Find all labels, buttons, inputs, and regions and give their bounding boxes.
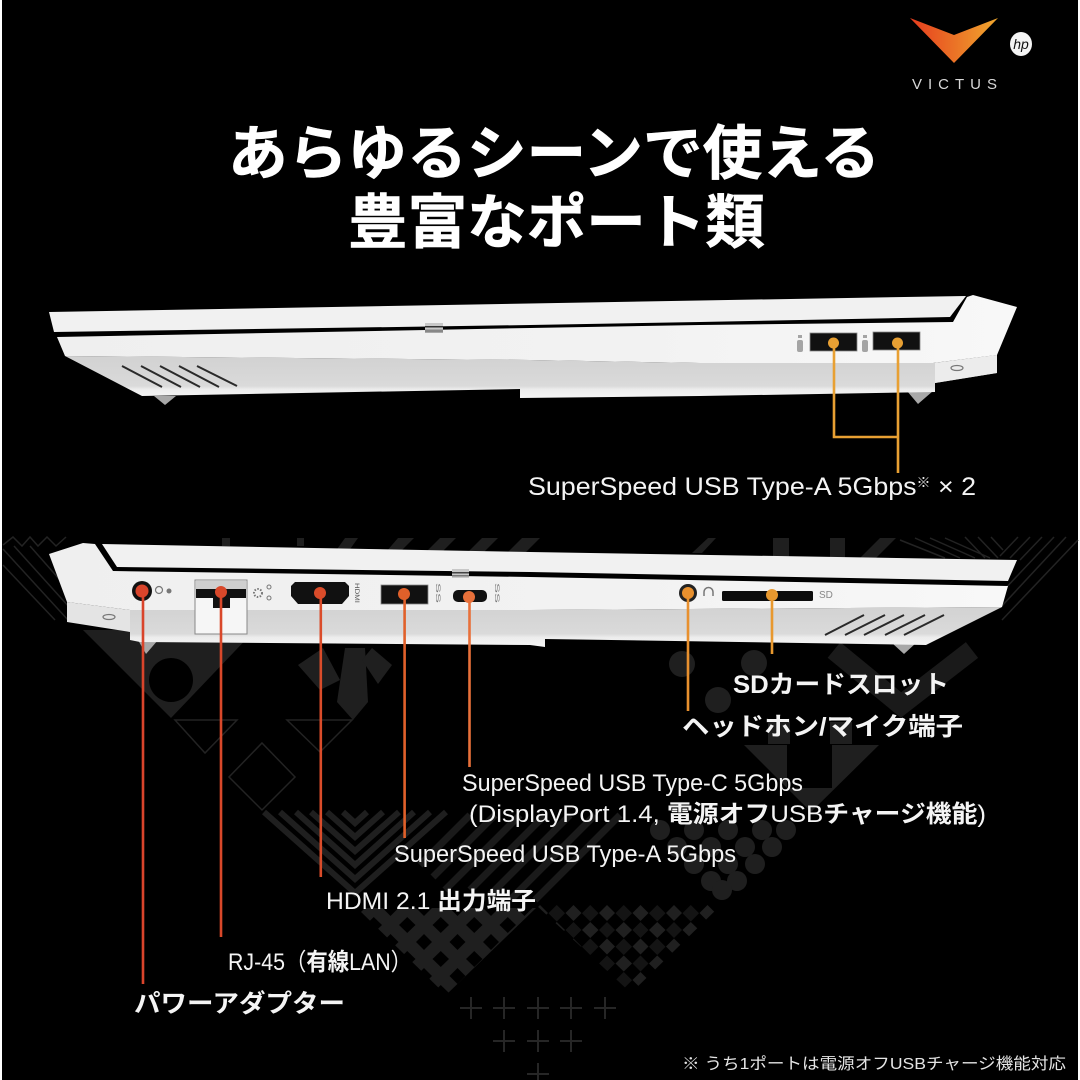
callout: power adapter line [136,584,148,984]
wordmark: VICTUS [912,76,997,93]
hinge mark [425,323,443,333]
label: USB-C: (DisplayPort 1.4, 電源オフ USBチャージ機能 ) [469,801,986,828]
callout: RJ-45 line [215,586,227,937]
footnote: ※ うち1ポートは電源オフUSBチャージ機能対応 [682,1055,1066,1073]
HDMI port [291,582,359,604]
callout: USB-A line [398,588,410,838]
label: HDMI: HDMI 2.1 出力端子 [326,888,536,915]
USB-C port: SS [493,583,499,603]
vent [122,366,237,387]
SD slot: SD [819,590,833,601]
logo: HP Victus [910,18,1032,93]
callout: SD line [766,589,778,654]
lid [49,296,966,332]
USB-A port [381,583,440,604]
USB-C port [453,583,499,603]
label: USB-A right side: SuperSpeed USB Type-A 5Gbps [528,473,890,501]
lid [102,544,1017,581]
USB-A port: SS [434,583,440,603]
label: USB-A right side: × 2 [931,473,976,501]
callout: HDMI line [314,587,326,877]
usb-a ports [810,332,920,351]
title [228,106,880,260]
feet [138,640,916,654]
base upper [57,295,1017,363]
callout dots [828,338,903,348]
label: RJ-45: RJ-45（有線LAN） [228,949,412,976]
hinge mark [452,569,469,578]
label: USB-A left side: SuperSpeed USB Type-A 5Gbps [394,841,736,868]
usb icons [797,335,868,352]
label: USB-C: SuperSpeed USB Type-C 5Gbps [462,770,803,797]
power logo mark [103,614,115,620]
label: power adapter: パワーアダプター [134,989,345,1018]
background geometric pattern [3,537,1078,1080]
callout: USB-C line [463,591,475,767]
power logo mark [951,366,963,370]
panel: laptop right side [49,295,1017,473]
HDMI port: HDMI [353,583,359,603]
callout lines: USB-A pair [834,343,898,473]
icon: Victus V mark [910,18,998,63]
headphone jack [679,584,713,602]
base lower [65,355,997,398]
base lower [130,607,1002,647]
base left corner [67,602,130,632]
label: USB-A right side: ※ [917,475,931,490]
SD slot [722,590,833,601]
power port [132,581,172,601]
callout: headphone line [682,587,694,711]
title: あらゆるシーンで使える [228,106,880,191]
title: 豊富なポート類 [348,175,765,260]
panel: laptop left side [49,543,1017,984]
label: headphone and mic: ヘッドホン/マイク端子 [682,713,963,741]
base upper [49,543,1008,610]
label: USB-C [462,770,986,828]
RJ-45 port [195,580,271,634]
label: SD card slot: SDカードスロット [733,671,949,699]
icon: HP badge: hp [1013,36,1029,52]
feet [154,391,933,405]
vent [825,615,944,635]
